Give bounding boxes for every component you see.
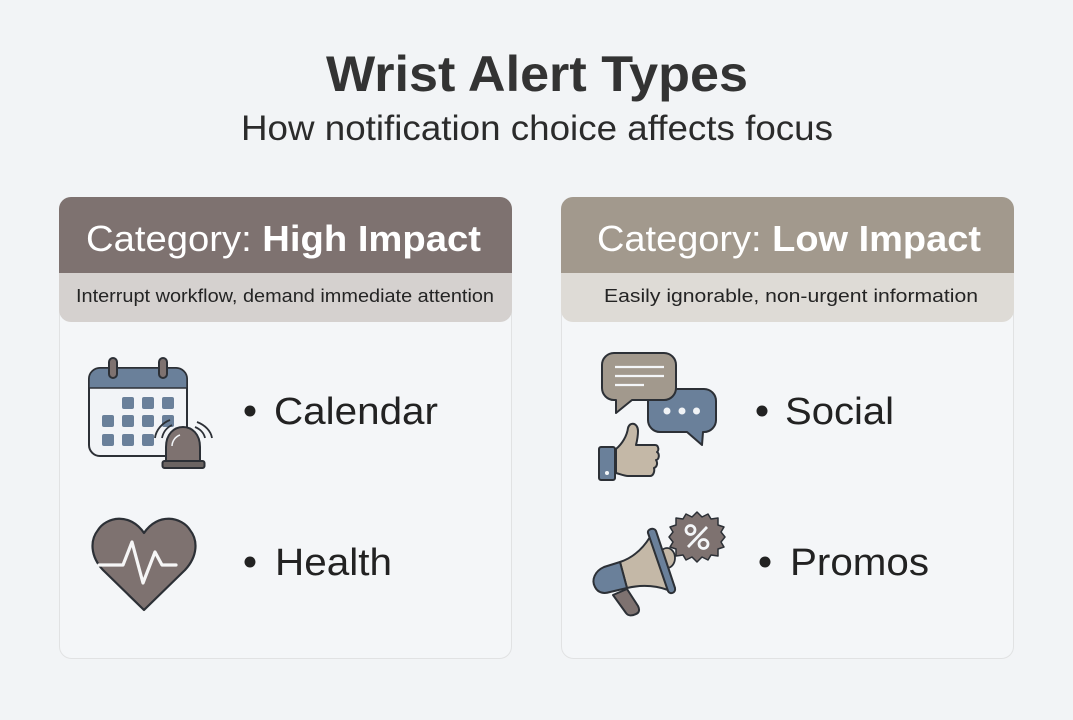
panel header band <box>59 197 512 273</box>
bullet and label: Calendar: Calendar <box>274 391 438 433</box>
icon: heart with pulse <box>93 519 195 610</box>
bullet and label: Promos: Promos <box>790 542 929 584</box>
panel heading: Category: High Impact <box>86 218 481 259</box>
panel header band <box>561 197 1014 273</box>
panel subheader band <box>561 273 1014 322</box>
title: Wrist Alert Types <box>326 46 748 102</box>
bullet and label: Social: Social <box>785 391 894 433</box>
panel: high impact <box>59 197 512 658</box>
bullet and label: Health: Health <box>275 542 392 584</box>
panel description: Interrupt workflow, demand immediate attention <box>76 285 494 306</box>
panel body <box>60 198 512 658</box>
panel heading: Category: Low Impact <box>597 218 981 259</box>
panel: low impact <box>561 197 1014 658</box>
subtitle: How notification choice affects focus <box>241 109 833 148</box>
icon: chat bubbles and thumbs up <box>599 353 716 480</box>
panel subheader band <box>59 273 512 322</box>
panel description: Easily ignorable, non-urgent information <box>604 285 978 306</box>
panel body <box>562 198 1014 658</box>
icon: calendar with alarm bell <box>89 358 212 468</box>
icon: megaphone and percent badge <box>593 512 725 615</box>
